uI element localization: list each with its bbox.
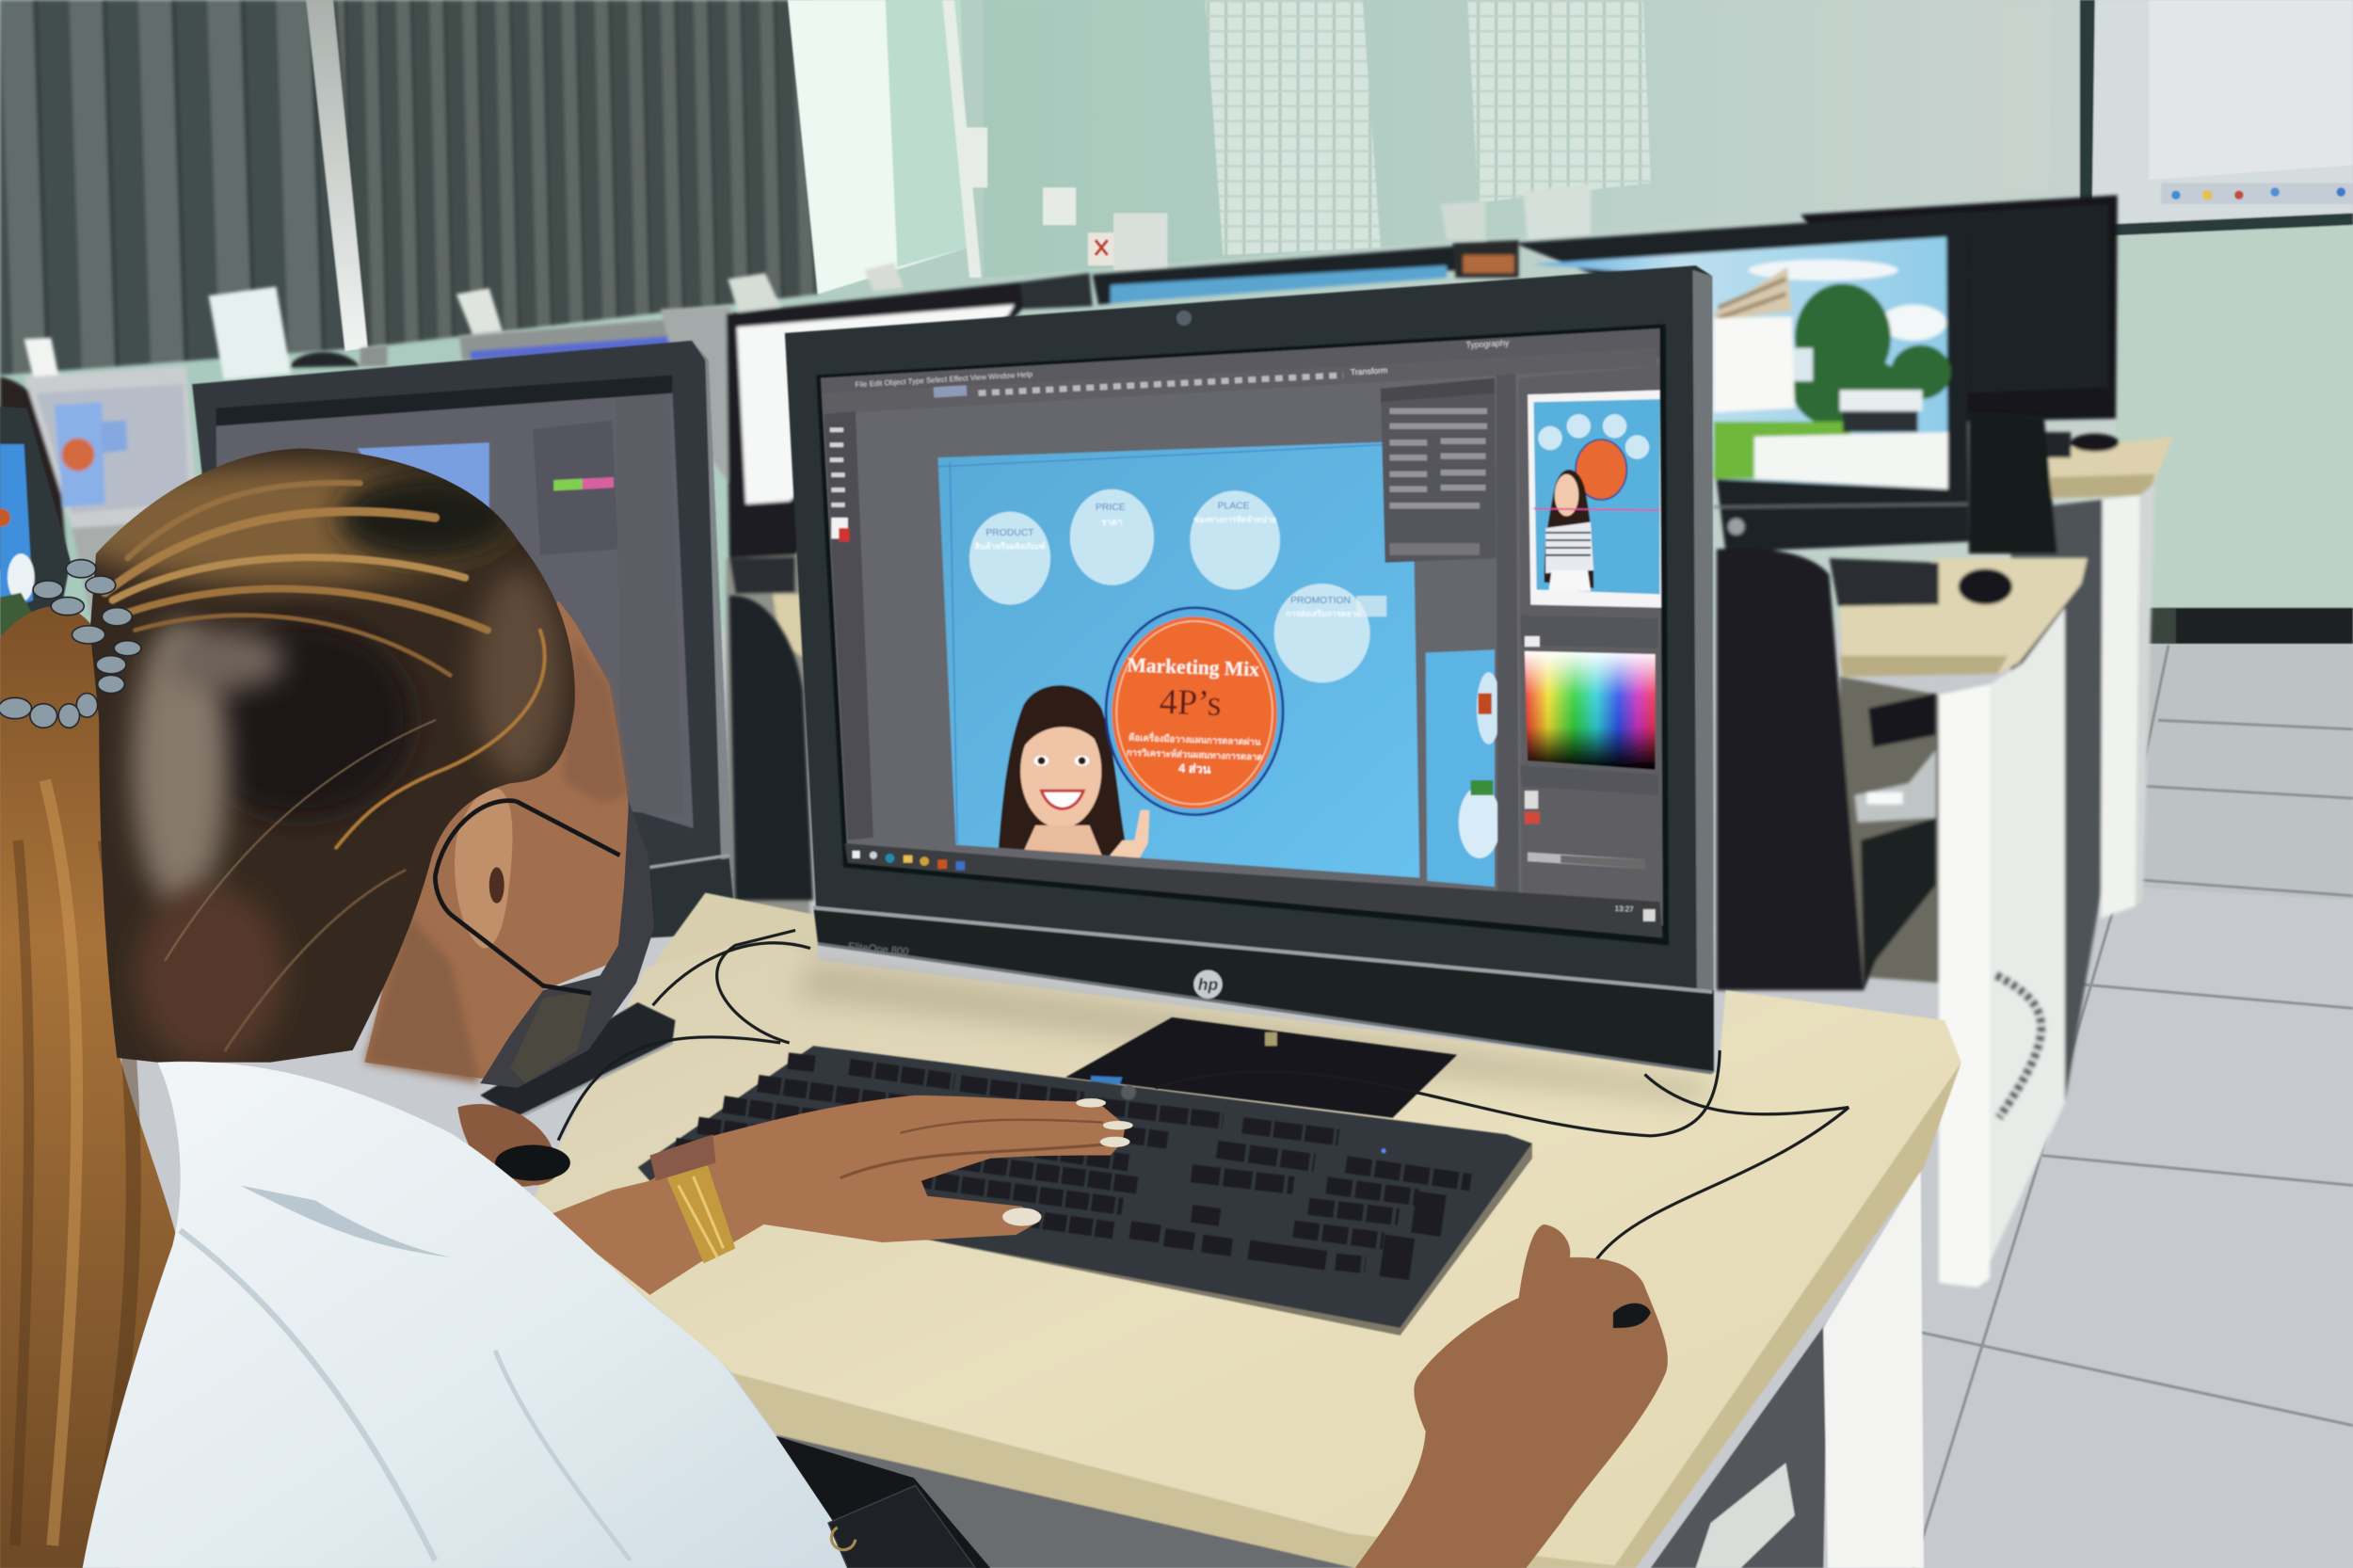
ear <box>455 789 513 949</box>
hair <box>90 448 576 1063</box>
marketing mix badge: คือเครื่องมือวางแผนการตลาดผ่าน <box>1128 730 1261 748</box>
right icon strip <box>1497 374 1519 901</box>
gray column <box>661 306 738 495</box>
keyboard base edge <box>927 1144 1532 1336</box>
fingernails <box>1002 1098 1133 1226</box>
hp logo <box>1193 970 1223 999</box>
forearm and hand on keyboard <box>548 1096 1126 1295</box>
lower back row <box>727 555 810 945</box>
paper signs <box>209 287 291 379</box>
white desk pedestal <box>1939 608 2065 1288</box>
keys: navigation cluster <box>1192 1149 1315 1185</box>
keys: main block <box>675 1083 1167 1230</box>
circle: place: ช่องทางการจัดจำหน่าย <box>1193 515 1276 524</box>
blue rear screen <box>1093 246 1456 305</box>
left background monitor <box>0 341 737 937</box>
pillar strip in curtains <box>306 0 368 351</box>
monitor screen: Illustrator workspace <box>816 324 1669 945</box>
desk underside and white pedestal <box>1651 1320 1828 1568</box>
cables <box>558 930 1849 1263</box>
cable coil <box>1996 975 2041 1118</box>
keys: arrows <box>1128 1205 1233 1256</box>
black monitor far right <box>1801 195 2118 422</box>
desk top <box>533 937 1961 1568</box>
artboard <box>937 441 1419 878</box>
floor tiles <box>1861 646 2353 1568</box>
whiteboard edge <box>942 0 982 278</box>
far mouse and keyboard <box>2071 434 2119 452</box>
bright pillar <box>788 0 968 294</box>
brand tag: EliteOne 800 <box>848 941 909 958</box>
circle: price <box>1070 489 1154 585</box>
curtains <box>0 0 818 376</box>
projector screen <box>2080 0 2353 237</box>
skin of neck and face <box>364 600 629 1083</box>
circle: product <box>969 512 1050 604</box>
tools panel <box>824 411 873 840</box>
side artboard <box>1426 649 1495 887</box>
monitor body <box>785 265 1714 1073</box>
gold wristwatch <box>649 1134 735 1263</box>
shirt <box>83 1062 864 1568</box>
marketing mix badge: การวิเคราะห์ส่วนผสมทางการตลาด <box>1127 747 1263 763</box>
main desk <box>533 893 1961 1568</box>
circle: price: ราคา <box>1101 518 1123 528</box>
projected taskbar <box>2161 183 2353 204</box>
circle: price: PRICE <box>1096 503 1126 513</box>
chair behind left monitor <box>729 596 813 901</box>
face mask <box>480 801 654 1088</box>
rear keyboard <box>729 556 795 594</box>
right wall <box>2116 225 2353 612</box>
windows taskbar <box>845 843 1663 937</box>
right arm and hand on mouse <box>1355 1224 1668 1568</box>
student group <box>1840 391 1922 432</box>
wall switch panels <box>967 128 987 187</box>
gradient panel <box>1520 765 1658 869</box>
circle: promotion: การส่งเสริมการตลาด <box>1286 609 1362 618</box>
back leg shadow region <box>2010 500 2103 1103</box>
webcam <box>1176 311 1192 326</box>
keyboard <box>480 1002 1532 1336</box>
circle: product: PRODUCT <box>985 528 1034 538</box>
control bar <box>823 348 1657 414</box>
keys: function row <box>788 1061 1338 1137</box>
marketing mix badge <box>1106 608 1283 815</box>
keyboard body <box>638 1046 1532 1328</box>
hp logo: hp <box>1198 975 1218 994</box>
monitor screen: Illustrator workspace: Transform <box>1350 365 1388 377</box>
chair <box>1717 548 1864 990</box>
desk front edge <box>732 1373 1636 1568</box>
pointing hand <box>1108 810 1149 861</box>
right back desks <box>729 212 2173 1288</box>
marketing mix badge: Marketing Mix <box>1127 653 1260 680</box>
classroom back wall and curtains <box>0 0 2353 644</box>
keys: numpad tall keys <box>1247 1191 1447 1280</box>
windows taskbar: 13:27 <box>1614 904 1634 914</box>
distant gray monitor tops <box>360 345 387 366</box>
menu bar <box>821 328 1659 408</box>
left background seat person hair <box>0 376 68 570</box>
navigator panel <box>1519 366 1663 922</box>
far-left gray monitor <box>24 366 198 528</box>
far desk <box>2048 437 2173 498</box>
rear monitor: white screen <box>727 282 1023 558</box>
white notice <box>1714 316 1795 412</box>
whiteboard <box>983 0 2053 278</box>
back row monitors and signs <box>0 183 2118 945</box>
marketing mix badge: 4P’s <box>1159 682 1222 724</box>
circle: promotion <box>1274 584 1386 682</box>
main monitor <box>785 265 1714 1118</box>
soft shadow below monitor <box>795 960 1714 1103</box>
near right desk top <box>1840 558 2088 675</box>
silver trim <box>813 908 1712 992</box>
right back monitor <box>1514 212 1969 552</box>
color spectrum picker <box>1520 616 1658 770</box>
circle: product: สินค้าหรือผลิตภัณฑ์ <box>974 540 1046 551</box>
lower gray area under far-left monitor <box>72 520 204 616</box>
armrest <box>1868 694 1936 747</box>
keys: numpad <box>1293 1164 1470 1265</box>
grass and white lawn <box>1714 422 1850 479</box>
circle: place: PLACE <box>1218 501 1250 511</box>
handbag <box>776 1436 990 1568</box>
left hand on small keyboard <box>457 1104 562 1187</box>
circle: promotion: PROMOTION <box>1290 596 1351 606</box>
far chair <box>1969 411 2057 553</box>
small keyboard at left desk <box>480 1002 675 1118</box>
desk back beyond monitor <box>646 893 818 975</box>
woman on artboard <box>998 685 1149 861</box>
character panel <box>1381 378 1497 563</box>
far-left small monitor edge <box>0 407 71 631</box>
monitor screen: Illustrator workspace: File Edit Object Type Select Effect View Window Help <box>855 370 1033 389</box>
ponytail <box>0 606 184 1568</box>
mask strap <box>435 801 619 993</box>
back keyboard and mouse <box>1830 558 1939 606</box>
seated person behind <box>290 352 360 368</box>
trees <box>1792 283 1951 426</box>
hair scrunchie <box>0 560 141 728</box>
hair strands <box>105 483 545 1050</box>
chin trim <box>1714 504 1967 507</box>
circle: place <box>1190 490 1280 590</box>
marketing mix badge: 4 ส่วน <box>1178 760 1211 776</box>
space under desk <box>1840 677 1939 983</box>
floor below desk <box>776 1434 1358 1568</box>
monitor screen: Illustrator workspace: Typography <box>1465 338 1510 350</box>
woman foreground <box>0 435 1668 1568</box>
window reflections <box>1205 0 1381 255</box>
key legends <box>1121 1085 1136 1100</box>
monitor stand <box>1065 1017 1457 1118</box>
